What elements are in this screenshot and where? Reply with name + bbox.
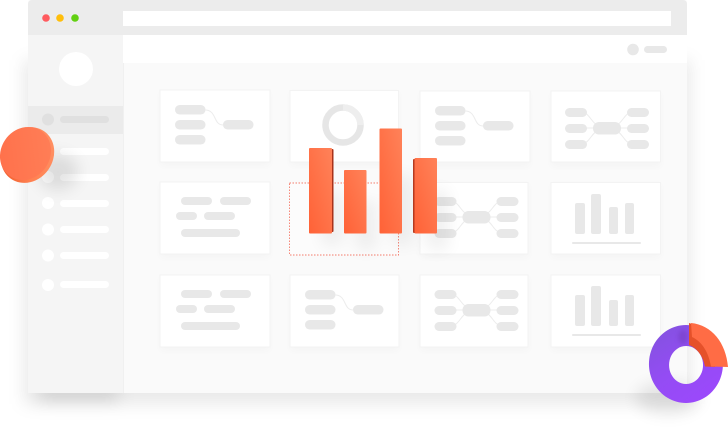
card: mind list 1 [160,90,270,162]
logo circle [59,52,93,86]
card: bar chart 1 [551,182,660,254]
gray donut [326,108,360,142]
window control: red [42,14,50,22]
bar 2 [344,170,366,234]
address bar [123,11,671,26]
card: mind list 2 [420,91,530,162]
top header bar [123,35,687,63]
orange slice side [689,323,715,367]
purple and orange donut [649,323,728,403]
user avatar [627,44,639,55]
bar 3 [380,128,402,234]
coin shadow [38,154,78,190]
orange coin [0,117,65,193]
card: mind map 1 [551,91,660,162]
window control: yellow [56,14,64,22]
sidebar [28,35,124,393]
shade beside slice [678,330,688,344]
donut shadow [636,382,700,414]
purple ring [649,325,723,403]
card: text lines 1 [160,182,270,254]
menu items [42,145,109,291]
title bar [28,0,687,35]
card: mind map 3 [420,275,528,347]
bar 4 [413,158,437,234]
card: text lines 2 [160,275,270,347]
orange bar chart [309,128,437,234]
card: donut [290,90,398,162]
bar 1 [309,148,334,234]
user name [644,46,667,53]
card: bar chart 2 [551,275,660,347]
orange slice [691,323,728,367]
bar shadows [322,175,448,250]
active menu item [28,106,123,134]
card: mind list 3 [290,275,399,347]
window shadow [24,60,690,404]
card shadows [160,92,661,351]
dashed selection [290,183,398,255]
card: mind map 2 [420,182,528,254]
window control: green [71,14,79,22]
